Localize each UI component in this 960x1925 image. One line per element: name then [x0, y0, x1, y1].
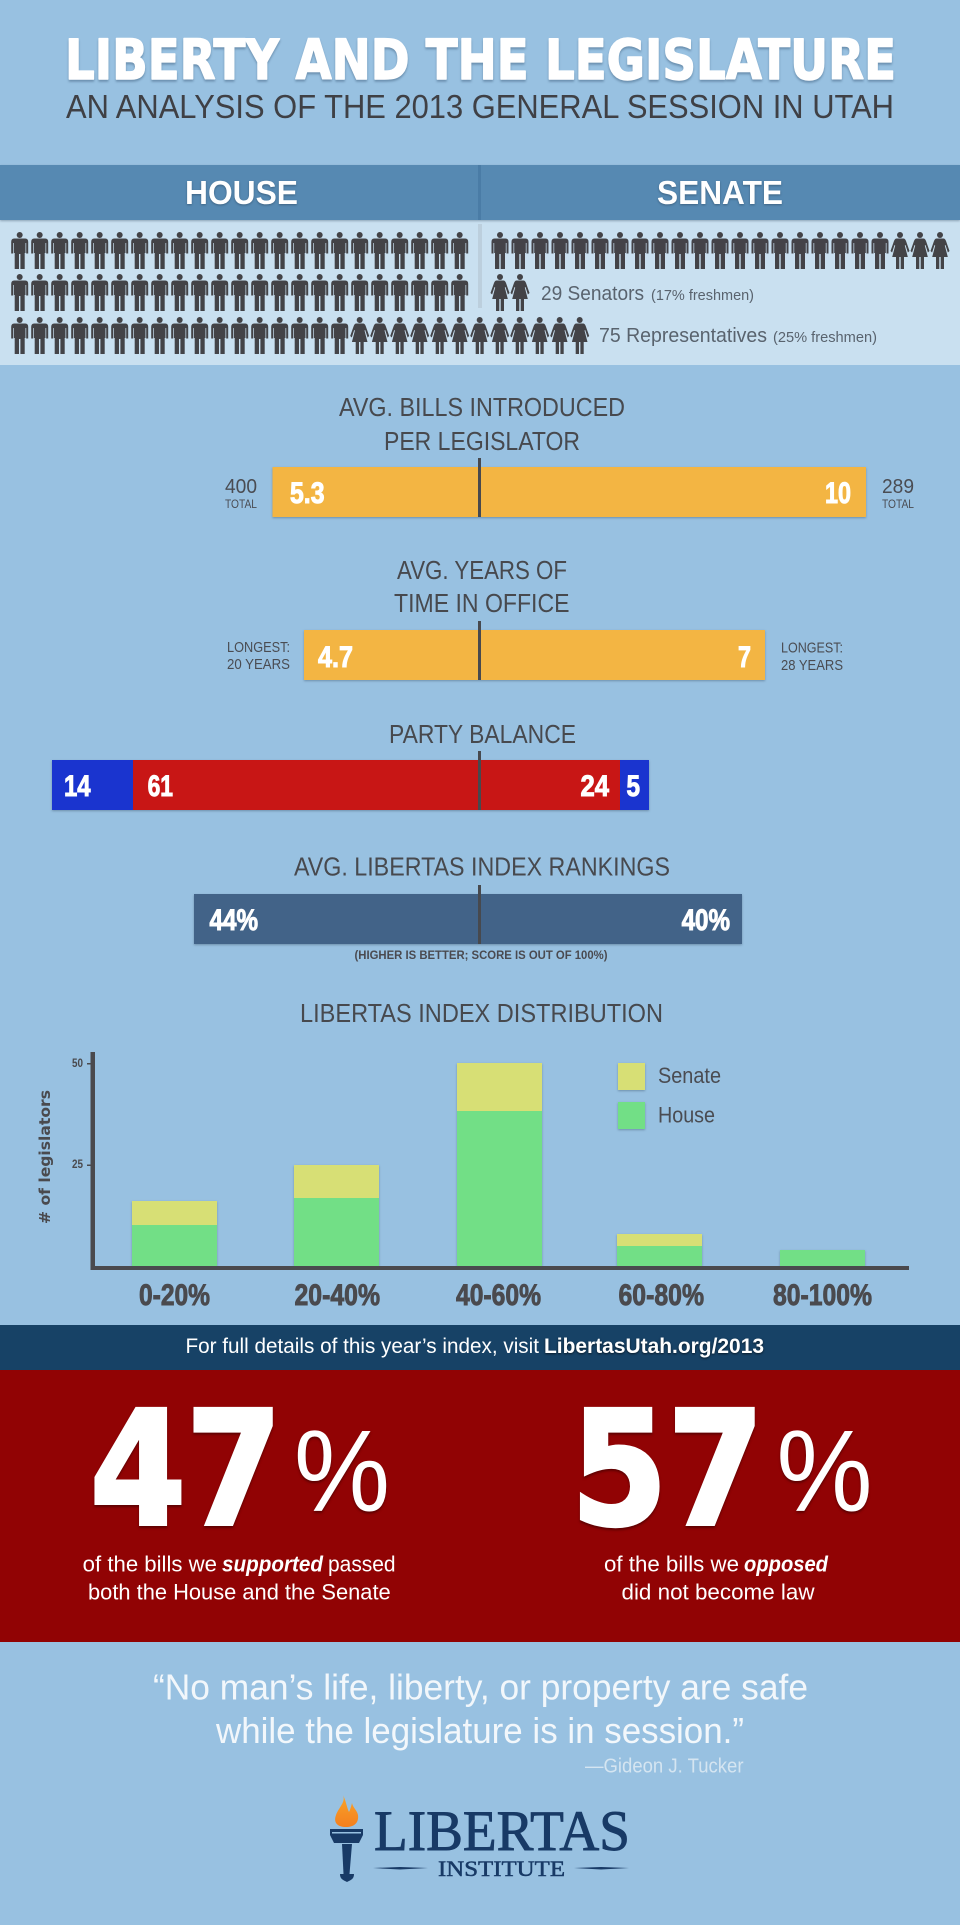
logo wordmark: INSTITUTE	[438, 1856, 565, 1881]
bars	[132, 1063, 865, 1266]
bar chart: libertas rankings	[194, 885, 742, 944]
stat: 47 percent: supported	[222, 1552, 324, 1576]
note: scoring: (HIGHER IS BETTER; SCORE IS OUT OF 100%)	[354, 948, 608, 962]
icons: house row 1	[11, 232, 468, 269]
bar chart: bills introduced: 400	[225, 476, 257, 498]
senators label: (17% freshmen)	[651, 287, 754, 304]
heading: libertas index distribution: LIBERTAS INDEX DISTRIBUTION	[300, 998, 663, 1028]
quote: “No man’s life, liberty, or property are safe	[153, 1666, 808, 1708]
header band: SENATE	[657, 174, 783, 211]
bar chart: bills introduced: TOTAL	[225, 497, 257, 511]
stat: 47 percent	[83, 1378, 396, 1605]
heading: avg bills introduced: AVG. BILLS INTRODUCED	[339, 392, 625, 422]
bar chart: libertas rankings: 44%	[210, 904, 258, 937]
bar chart: years in office: 4.7	[318, 641, 353, 674]
bar chart: party balance: 14	[64, 770, 91, 803]
representatives label: 75 Representatives	[599, 325, 767, 347]
x labels	[139, 1279, 872, 1312]
banner: full details link	[0, 1325, 960, 1370]
bar chart: bills introduced	[225, 458, 914, 517]
heading: avg bills introduced	[339, 392, 625, 456]
bar chart: party balance: 24	[580, 770, 609, 803]
bar chart: libertas rankings: 40%	[682, 904, 730, 937]
quote: —Gideon J. Tucker	[585, 1756, 744, 1778]
icon: torch	[330, 1795, 363, 1882]
y ticks: 25	[72, 1157, 83, 1171]
stat: 47 percent: both the House and the Senate	[88, 1580, 391, 1605]
y axis label: # of legislators	[36, 1090, 54, 1224]
bar chart: party balance: 5	[626, 770, 640, 803]
chart: index distribution	[36, 1052, 909, 1312]
panel: house and senate people counts	[0, 165, 960, 365]
axes	[87, 1052, 909, 1270]
panel: passage statistics	[0, 1370, 960, 1642]
x labels: 60-80%	[618, 1279, 704, 1312]
stat: 57 percent	[571, 1378, 872, 1605]
stat: 57 percent: did not become law	[622, 1580, 815, 1605]
icons: house row 2	[11, 274, 468, 311]
heading: avg libertas index rankings: AVG. LIBERTAS INDEX RANKINGS	[294, 852, 670, 882]
bar chart: years in office	[227, 621, 843, 680]
bar chart: bills introduced: 289	[882, 476, 914, 498]
logo: Libertas Institute	[330, 1795, 630, 1882]
icons: house row 3	[11, 317, 589, 354]
stat: 57 percent: %	[776, 1406, 872, 1536]
senators label: 29 Senators	[541, 283, 644, 305]
heading: party balance: PARTY BALANCE	[389, 719, 576, 749]
stat: 47 percent: passed	[328, 1552, 396, 1576]
bar chart: years in office: 28 YEARS	[781, 657, 843, 674]
x labels: 80-100%	[773, 1279, 872, 1312]
legend	[618, 1063, 721, 1129]
bar chart: years in office: LONGEST:	[781, 640, 843, 656]
y ticks	[72, 1056, 83, 1171]
stat: 57 percent: 57	[571, 1378, 764, 1562]
icons: senate row 1	[492, 232, 950, 269]
bar chart: party balance	[52, 751, 649, 810]
subtitle: AN ANALYSIS OF THE 2013 GENERAL SESSION IN UTAH	[66, 88, 894, 125]
quote: while the legislature is in session.”	[215, 1710, 744, 1751]
x labels: 40-60%	[456, 1279, 541, 1312]
senators label	[541, 283, 754, 305]
header band	[0, 165, 960, 220]
people panel background	[0, 220, 960, 365]
quote	[153, 1666, 808, 1778]
bar chart: bills introduced: 10	[825, 477, 851, 510]
bar chart: bills introduced: TOTAL	[882, 497, 914, 511]
stat: 47 percent: %	[294, 1406, 390, 1536]
heading: avg years in office	[394, 555, 570, 618]
stat: 47 percent: 47	[90, 1378, 282, 1562]
bar chart: years in office: LONGEST:	[227, 639, 290, 656]
heading: avg years in office: AVG. YEARS OF	[397, 555, 567, 585]
heading: avg bills introduced: PER LEGISLATOR	[384, 426, 580, 456]
stat: 47 percent: of the bills we	[83, 1552, 217, 1576]
logo wordmark: LIBERTAS	[374, 1800, 630, 1863]
stat: 57 percent: of the bills we	[604, 1552, 739, 1576]
header band: HOUSE	[185, 174, 298, 211]
x labels: 0-20%	[139, 1279, 210, 1312]
stat: 57 percent: opposed	[744, 1552, 829, 1576]
legend: House	[658, 1102, 715, 1128]
legend: Senate	[658, 1063, 721, 1088]
representatives label: (25% freshmen)	[773, 329, 877, 346]
x labels: 20-40%	[294, 1279, 380, 1312]
bar chart: years in office: 20 YEARS	[227, 656, 290, 673]
bar chart: party balance: 61	[148, 770, 173, 803]
representatives label	[599, 325, 877, 347]
icons: senate row 2	[490, 274, 530, 311]
banner: full details link: LibertasUtah.org/2013	[544, 1335, 764, 1358]
bar chart: years in office: 7	[738, 641, 751, 674]
y ticks: 50	[72, 1056, 83, 1070]
bar chart: bills introduced: 5.3	[290, 477, 324, 510]
heading: avg years in office: TIME IN OFFICE	[394, 588, 570, 618]
banner: full details link: For full details of this year’s index, visit	[186, 1335, 539, 1358]
